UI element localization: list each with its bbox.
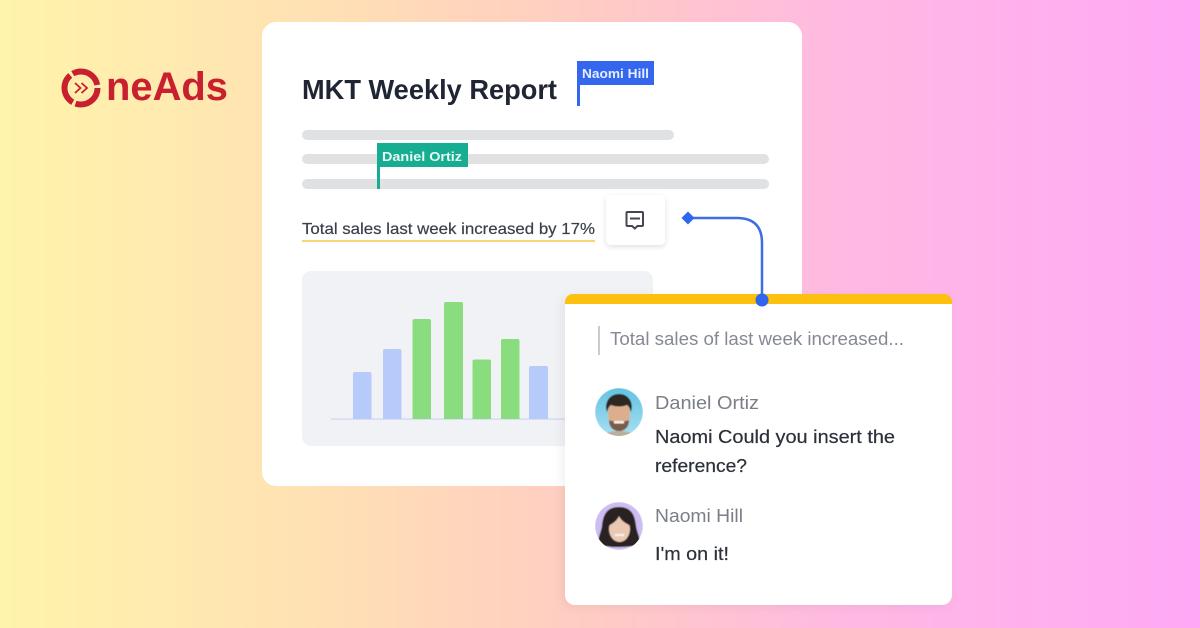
tag: Naomi Hill: Naomi Hill <box>582 66 649 81</box>
comment: Naomi Hill <box>595 502 743 564</box>
tag: Daniel Ortiz: Daniel Ortiz <box>382 149 463 164</box>
quote: Total sales of last week increased... <box>610 329 904 349</box>
comment text: I'm on it! <box>655 544 729 564</box>
logo wordmark: neAds <box>106 65 228 109</box>
comment: Daniel Ortiz: reference? <box>655 456 747 476</box>
panel: weekly report card <box>262 22 802 486</box>
chart: bar chart <box>302 271 653 446</box>
placeholder text lines <box>302 130 769 189</box>
icon: Naomi avatar <box>595 502 643 550</box>
comment: Daniel Ortiz <box>595 388 895 476</box>
icon: logo ring with arrows <box>64 72 98 104</box>
comment text: Naomi Could you insert the <box>655 427 895 447</box>
arrow: connector from comment to thread <box>682 212 768 306</box>
icon: comment button <box>606 195 665 245</box>
highlighted sentence: Total sales last week increased by 17% <box>302 221 595 238</box>
commenter name: Naomi Hill <box>655 506 743 526</box>
blue bars <box>353 349 548 419</box>
icon: Daniel avatar <box>595 388 643 441</box>
heading: report title: MKT Weekly Report <box>302 74 557 105</box>
logo: OneAds <box>64 65 228 109</box>
panel: comment thread <box>565 294 952 605</box>
commenter name: Daniel Ortiz <box>655 393 759 413</box>
tag: Naomi Hill <box>577 61 654 106</box>
green bars <box>412 302 520 419</box>
panel top accent <box>565 294 952 304</box>
tag: Daniel Ortiz <box>377 143 468 189</box>
chart baseline <box>331 418 571 420</box>
